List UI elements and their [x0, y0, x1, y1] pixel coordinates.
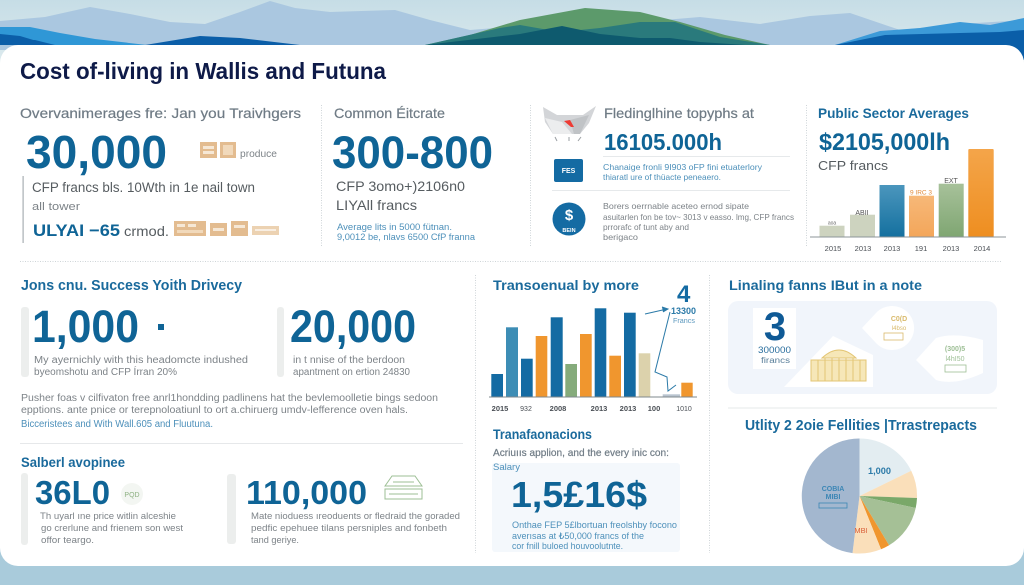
range unit: crmod.	[124, 223, 169, 239]
bar chart: public sector: 191	[915, 244, 927, 253]
panel: public sector averages	[810, 105, 1006, 253]
heading: fees: Fledinglhine topyphs at	[604, 105, 754, 121]
panel: transactions	[492, 427, 680, 552]
description text: CFP francs bls. 10Wth in 1e nail town	[32, 180, 255, 195]
bar chart: public sector: 2014	[974, 244, 990, 253]
arrow: trend callout	[645, 307, 676, 391]
pie chart: MBI	[854, 526, 868, 535]
icon: market stalls	[174, 221, 279, 236]
bubble: yellow figures: C0(D	[891, 316, 907, 323]
note line 1: Average lits in 5000 fütnan.	[337, 222, 452, 232]
note background	[728, 301, 997, 394]
range value: ULYAI −65	[33, 221, 120, 240]
salary note	[512, 520, 677, 551]
salary text 2: pedfic epehuee tilans persniples and fonbeth	[251, 523, 447, 534]
bar chart: public sector: 2013	[943, 244, 959, 253]
big number 30,000: 30,000	[26, 126, 167, 178]
salary text 2: tand geriye.	[251, 535, 299, 546]
divider	[530, 105, 532, 247]
stat tile: 3	[764, 305, 786, 349]
heading: success: Jons cnu. Success Yoith Drivecy	[21, 278, 242, 294]
stat text 1	[34, 355, 248, 378]
icon: folded paper	[543, 106, 596, 141]
panel: common estimate	[332, 105, 493, 242]
vertical rule	[22, 176, 24, 243]
heading: overview: Overvanimerages fre: Jan you Traivhgers	[20, 105, 301, 121]
stat text 2	[293, 355, 410, 378]
panel: transport by month chart	[489, 277, 697, 413]
bar chart: public sector	[810, 149, 1006, 253]
bar chart: public sector: 9 IRC 3	[910, 190, 932, 196]
stat text 2: in t nnise of the berdoon	[293, 355, 405, 366]
bar chart: public sector: 2013	[855, 244, 871, 253]
bar chart: public sector: 2015	[825, 244, 841, 253]
big number 1,000: 1,000	[32, 301, 139, 352]
heading: public sector: Public Sector Averages	[818, 105, 969, 121]
unit: CFP francs: CFP francs	[818, 158, 889, 173]
bubble: green figures: (300)5	[945, 346, 965, 353]
bar chart: public sector: 2013	[884, 244, 900, 253]
divider	[474, 275, 476, 553]
charges text: Borers oerrnable aceteo ernod sipate	[603, 201, 749, 211]
panel: salary averages	[21, 454, 460, 546]
title: Cost of-living in Wallis and Futuna	[20, 58, 386, 84]
big number 20,000: 20,000	[290, 301, 416, 352]
fee note line 2: thiaratl ure of thüacte peneaero.	[603, 172, 721, 182]
icon: dollar coin	[552, 202, 586, 236]
icon: PQD badge	[121, 483, 143, 505]
label: produce: produce	[240, 149, 277, 160]
bar chart: transport	[489, 308, 697, 397]
stat tile: 300000	[758, 345, 791, 355]
number 16105.000h: 16105.000h	[604, 129, 722, 155]
divider	[806, 105, 808, 247]
salary text 1: offor teargo.	[41, 535, 94, 546]
icon: dollar coin: $	[565, 207, 574, 224]
axis labels: 100	[648, 404, 660, 413]
salary text 1	[40, 511, 183, 546]
number 110,000: 110,000	[246, 474, 367, 511]
description line 1: CFP 3omo+)2106n0	[336, 178, 465, 194]
big number 300-800: 300-800	[332, 127, 493, 178]
bar chart: public sector: aoa	[828, 220, 836, 226]
heading: transport: Transoenual by more	[493, 277, 639, 293]
charges text: prrorafc of tunt aby and	[603, 222, 689, 232]
bar chart: public sector: EXT	[944, 178, 959, 185]
panel: lending note	[728, 277, 997, 394]
salary text 1: Th uyarl ıne price witlin alceshie	[40, 511, 176, 522]
axis labels	[492, 404, 692, 413]
panel: overview averages	[20, 105, 301, 243]
icon: yellow building	[784, 336, 873, 387]
number 36L0: 36L0	[35, 474, 110, 511]
panel: utility pie	[745, 418, 977, 554]
pie chart	[802, 438, 917, 554]
paragraph	[21, 393, 438, 430]
axis labels: 2008	[550, 404, 566, 413]
note line 2: 9,0012 be, nlavs 6500 CfP franna	[337, 232, 475, 242]
stat tile	[753, 305, 796, 369]
callout number 4: 4	[677, 281, 691, 308]
salary text 2	[251, 511, 460, 546]
heading: transactions: Tranafaonacions	[493, 427, 592, 442]
number $2105,000lh: $2105,000lh	[819, 129, 950, 156]
bar chart: public sector: ABII	[855, 210, 869, 217]
stat text 1: My ayernichly with this headomcte indushed	[34, 355, 248, 366]
stat text 1: byeomshotu and CFP Írran 20%	[34, 365, 177, 378]
icon: produce crates	[200, 142, 236, 158]
axis labels: 2013	[620, 404, 636, 413]
salary note: Onthae FEP 5£lbortuan freolshby focono	[512, 520, 677, 530]
axis labels: 932	[520, 406, 532, 413]
charges text: asuitarlen fon be tov~ 3013 v easso. lmg, CFP francs	[603, 212, 794, 222]
paragraph: Bicceristees and With Wall.605 and Fluutuna.	[21, 419, 213, 430]
icon: FES badge	[554, 159, 583, 182]
pie chart: 1,000	[868, 466, 891, 476]
label: salary: Salary	[493, 462, 520, 473]
divider	[708, 275, 710, 553]
stat tile: firancs	[761, 356, 790, 365]
salary text 1: go crerlune and frienem son west	[41, 523, 183, 534]
panel: fees and charges	[543, 105, 794, 242]
divider	[320, 105, 322, 247]
pie chart: COBIA	[822, 486, 844, 493]
callout unit: Francs	[673, 318, 696, 325]
salary note: cor fnill buloed houvoolutnte.	[512, 541, 623, 551]
salary text 2: Mate nioduess ıreoduents or fledraid the goraded	[251, 511, 460, 522]
heading: utility: Utlity 2 2oie Fellities |Trrastrepacts	[745, 418, 977, 434]
icon: FES badge: FES	[562, 168, 576, 175]
heading: lending: Linaling fanns IBut in a note	[729, 277, 922, 293]
charges text	[603, 201, 794, 242]
axis labels: 2015	[492, 404, 508, 413]
panel: youth and housing stats	[21, 278, 438, 430]
horizontal divider	[20, 260, 1002, 262]
salary card background	[492, 463, 680, 552]
callout value: 13300	[671, 306, 696, 316]
axis labels: 1010	[676, 406, 692, 413]
paragraph: epptions. ante pnice or terepnoloatiunl to ort a.chiruerg umdv-lefference oven hals.	[21, 405, 408, 416]
heading: common: Common Éitcrate	[334, 105, 445, 121]
bubble: green figures	[916, 335, 983, 382]
paragraph: Pusher foas v cilfivaton free anrl1hondding padlinens hat the bevlemoolletie bings sedoon	[21, 393, 438, 404]
description line 2: LIYAll francs	[336, 197, 417, 213]
bubble: yellow figures	[862, 306, 914, 350]
axis labels: 2013	[591, 404, 607, 413]
icon: PQD badge: PQD	[124, 492, 140, 499]
number 1,5£16$: 1,5£16$	[511, 474, 647, 515]
heading: salary: Salberl avopinee	[21, 454, 125, 470]
icon: dollar coin: BEIN	[562, 228, 576, 234]
stat text 2: apantment on ertion 24830	[293, 367, 410, 378]
subheading: Acriuııs applion, and the every inic con:	[493, 447, 669, 459]
mountain banner	[0, 1, 1024, 60]
charges text: berigaco	[603, 232, 638, 242]
bubble: yellow figures: l4bso	[892, 326, 907, 332]
salary note: averısas at ₺50,000 francs of the	[512, 531, 644, 541]
fee note line 1: Chanaige fronli 9I903 oFP fini etuaterlory	[603, 162, 763, 172]
bubble: green figures: l4hI50	[945, 356, 965, 363]
pie chart: MIBI	[826, 494, 840, 501]
description second line: all tower	[32, 201, 80, 213]
icon: green building	[385, 476, 422, 499]
